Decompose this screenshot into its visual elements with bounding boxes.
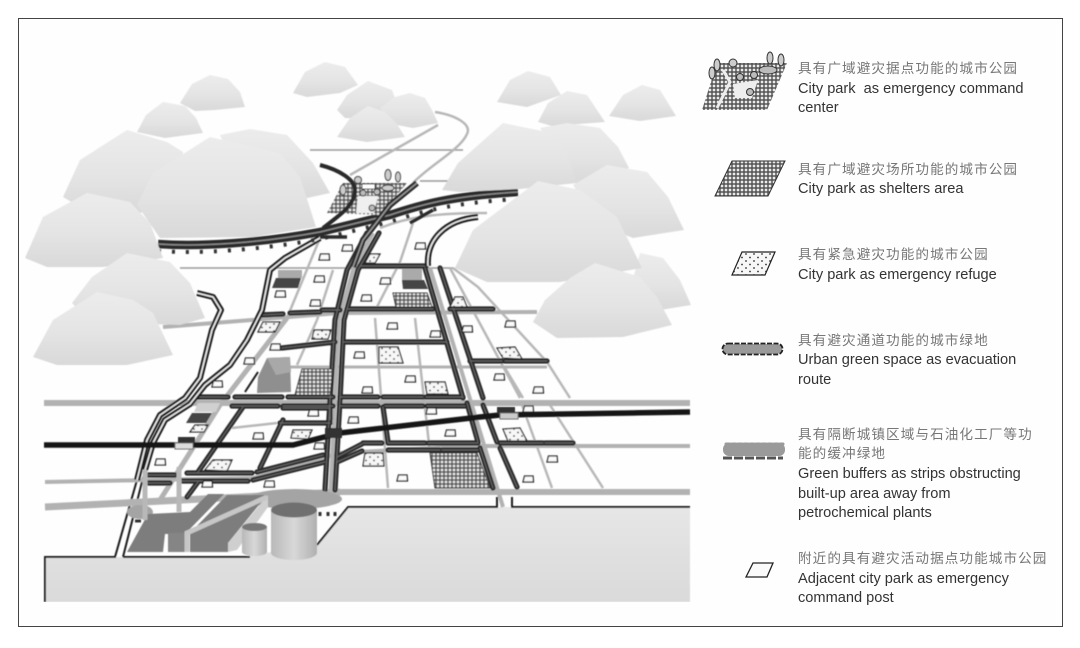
label: command post xyxy=(798,590,894,606)
label: 附近的具有避灾活动据点功能城市公园 xyxy=(798,550,1047,566)
label: 具有广域避灾据点功能的城市公园 xyxy=(798,60,1018,76)
icon: small park xyxy=(746,563,773,577)
legend item: emergency command center xyxy=(702,52,1023,116)
elevated highway xyxy=(158,192,518,252)
label: Urban green space as evacuation xyxy=(798,352,1016,368)
adjacent small parks xyxy=(155,243,558,487)
emergency command center park xyxy=(320,165,417,267)
legend item: emergency command post xyxy=(746,550,1047,606)
mid-city gray building xyxy=(245,357,291,393)
label: 能的缓冲绿地 xyxy=(798,446,886,461)
label: 具有广域避灾场所功能的城市公园 xyxy=(798,161,1018,177)
base land below the coast xyxy=(45,507,690,602)
legend item: evacuation route xyxy=(722,332,1016,388)
label: 具有隔断城镇区域与石油化工厂等功 xyxy=(798,426,1033,442)
thin background roads xyxy=(180,112,603,488)
rail line xyxy=(44,412,690,445)
label: petrochemical plants xyxy=(798,505,932,521)
label: built-up area away from xyxy=(798,486,950,502)
double-lined curving roads xyxy=(137,217,478,480)
icon: shelter park xyxy=(715,161,785,196)
road bands xyxy=(44,233,690,507)
label: City park as emergency refuge xyxy=(798,267,997,283)
icon: buffer strip xyxy=(723,443,785,458)
petrochemical plant buffer xyxy=(127,489,342,521)
label xyxy=(798,246,997,283)
storage tanks xyxy=(242,502,317,560)
label: 具有避灾通道功能的城市绿地 xyxy=(798,332,989,348)
label xyxy=(798,60,1023,116)
label xyxy=(798,426,1033,521)
label: route xyxy=(798,372,831,388)
label: City park as emergency command xyxy=(798,81,1023,97)
legend item: emergency refuge xyxy=(732,246,997,283)
petrochemical plant buildings xyxy=(127,467,268,552)
legend item: shelters area xyxy=(715,161,1018,197)
label: Green buffers as strips obstructing xyxy=(798,466,1021,482)
stations on the rail line xyxy=(175,407,518,449)
label: Adjacent city park as emergency xyxy=(798,571,1010,587)
label: 具有紧急避灾功能的城市公园 xyxy=(798,246,989,262)
legend item: green buffers xyxy=(723,426,1033,521)
dark parks with gray buildings xyxy=(186,269,428,423)
label: City park as shelters area xyxy=(798,181,964,197)
map illustration xyxy=(25,62,691,602)
label xyxy=(798,550,1047,606)
icon: command center park xyxy=(702,52,787,110)
label xyxy=(798,161,1018,197)
label: center xyxy=(798,100,839,116)
legend xyxy=(702,52,1047,606)
emergency refuge parks xyxy=(190,254,527,471)
hills: left group xyxy=(25,62,438,365)
label xyxy=(798,332,1016,388)
hedge evacuation routes xyxy=(148,233,573,497)
coastline xyxy=(45,470,690,602)
icon: hedge strip xyxy=(722,344,782,354)
icon: refuge park xyxy=(732,252,775,275)
hills: right group xyxy=(442,71,691,338)
shelter parks xyxy=(295,293,490,488)
